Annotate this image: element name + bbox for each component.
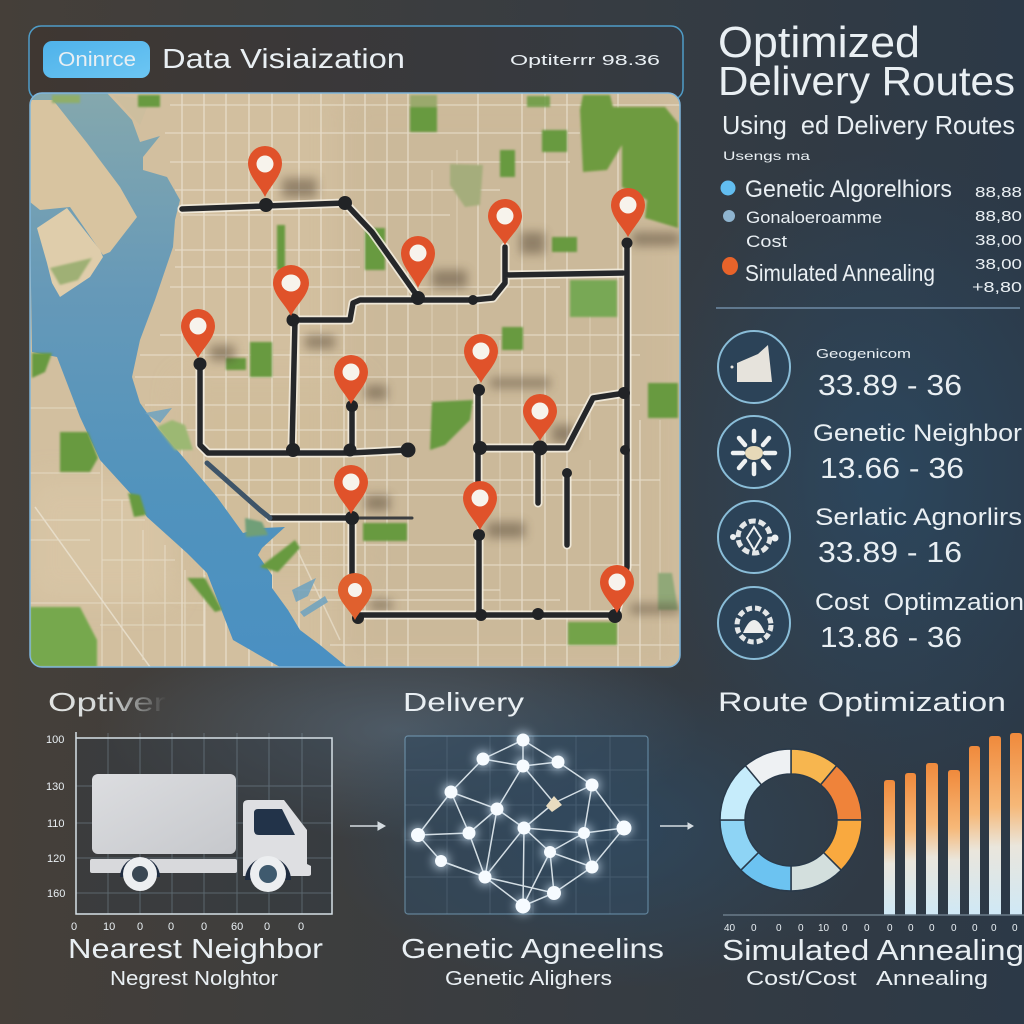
metric 3: 33.89 - 16 — [818, 537, 962, 569]
panel: route map — [28, 90, 680, 670]
chart axis labels: 0 — [864, 923, 870, 934]
x axis labels: 0 — [298, 921, 304, 933]
vegetation patches — [30, 95, 678, 667]
chart axis labels: 0 — [798, 923, 804, 934]
chart axis labels: 0 — [991, 923, 997, 934]
pin 7 — [334, 355, 368, 404]
chart axis labels: 0 — [908, 923, 914, 934]
metric 4: Cost Optimzation — [815, 589, 1024, 616]
upper island — [30, 100, 137, 255]
network node glow — [410, 732, 632, 914]
metric 3 — [718, 501, 1022, 573]
x axis labels: 0 — [137, 921, 143, 933]
section heading: delivery: Delivery — [403, 687, 524, 717]
subtitle: Using ed Delivery Routes — [722, 110, 1015, 140]
chart sublabel: nearest neighbor: Negrest Nolghtor — [110, 968, 278, 990]
pin shadows — [210, 178, 680, 614]
title: Optimized — [718, 18, 920, 67]
x axis labels: 10 — [103, 921, 115, 933]
title: Delivery Routes — [718, 58, 1015, 104]
chart axis labels: 0 — [1012, 923, 1018, 934]
chart baseline — [723, 914, 1024, 916]
chart axis labels: 0 — [751, 923, 757, 934]
map pins — [181, 146, 645, 620]
metric 1 — [718, 331, 962, 403]
lower island — [37, 208, 103, 297]
legend row: simulated annealing: +8,80 — [972, 279, 1022, 296]
pin 3 — [611, 188, 645, 237]
pin 12 — [338, 573, 372, 620]
panel: map header bar — [29, 26, 683, 100]
panel: route optimization charts — [720, 733, 1024, 934]
metric 4 — [718, 587, 1024, 659]
chart axis labels: 10 — [818, 923, 830, 934]
map border — [30, 93, 680, 667]
x axis labels — [71, 921, 304, 933]
pin 4 — [401, 236, 435, 288]
chart axis labels: 40 — [724, 923, 736, 934]
x axis labels: 0 — [71, 921, 77, 933]
y axis labels: 120 — [47, 853, 65, 865]
chart axis labels — [724, 923, 1018, 934]
chart label: simulated annealing: Simulated Annealing — [722, 935, 1024, 967]
arrow: truck to network — [350, 822, 385, 830]
section heading: optimize: Optiver — [48, 687, 166, 717]
icon: network gear — [718, 501, 790, 573]
panel: genetic network chart — [405, 732, 648, 914]
icon: delivery truck — [90, 774, 311, 892]
panel: nearest neighbor chart — [46, 732, 332, 933]
legend row: cost: Cost — [746, 232, 787, 251]
river bank details — [145, 408, 328, 617]
metric 4: 13.86 - 36 — [820, 622, 962, 654]
legend row: simulated annealing: Simulated Annealing — [745, 260, 935, 286]
chart axis labels: 0 — [951, 923, 957, 934]
badge: Oninrce — [58, 49, 136, 71]
y axis labels — [46, 734, 65, 900]
network grid — [405, 736, 648, 914]
pin 1 — [248, 146, 282, 197]
chart axis labels: 0 — [887, 923, 893, 934]
legend row: cost: 38,00 — [975, 232, 1022, 249]
header status: Optiterrr 98.36 — [510, 52, 660, 69]
divider — [716, 307, 1020, 309]
pin 8 — [464, 334, 498, 383]
icon: cost gear — [718, 587, 790, 659]
north shore detail — [113, 95, 150, 125]
river — [28, 90, 347, 667]
x axis labels: 0 — [264, 921, 270, 933]
donut chart — [720, 749, 862, 891]
header title: Data Visiaization — [162, 43, 405, 74]
panel: legend list — [720, 176, 1022, 296]
pin 9 — [523, 394, 557, 441]
metric 2: 13.66 - 36 — [820, 453, 964, 485]
pin 6 — [181, 309, 215, 358]
legend row: genetic algorithms: Genetic Algorelhiors — [745, 176, 952, 203]
legend row: cost — [746, 232, 1022, 251]
pin 11 — [463, 481, 497, 530]
panel: metric list — [718, 331, 1024, 659]
title — [718, 18, 1015, 104]
x axis labels: 60 — [231, 921, 243, 933]
pin 2 — [488, 199, 522, 245]
arrow: network to charts — [660, 823, 693, 829]
legend row: simulated annealing: 38,00 — [975, 256, 1022, 273]
network nodes — [411, 734, 632, 914]
x axis labels: 0 — [201, 921, 207, 933]
land base — [30, 90, 680, 670]
network edges — [418, 740, 624, 906]
chart axis labels: 0 — [776, 923, 782, 934]
small caption: Usengs ma — [723, 149, 810, 163]
chart axis labels: 0 — [842, 923, 848, 934]
section heading: route optimization: Route Optimization — [718, 687, 1006, 717]
legend row: generation: Gonaloeroamme — [746, 208, 882, 227]
chart sublabel: genetic: Genetic Alighers — [445, 968, 612, 990]
legend row: genetic algorithms: 88,88 — [975, 184, 1022, 201]
chart label: nearest neighbor: Nearest Neighbor — [68, 933, 323, 964]
y axis labels: 110 — [47, 818, 65, 830]
pin 10 — [334, 465, 368, 514]
chart sublabel: cost annealing: Cost/Cost Annealing — [746, 968, 988, 990]
legend row: generation: 88,80 — [975, 208, 1022, 225]
chart axis labels: 0 — [929, 923, 935, 934]
metric 1: 33.89 - 36 — [818, 370, 962, 402]
badge — [43, 41, 150, 78]
metric 2 — [718, 416, 1022, 488]
legend row: simulated annealing — [722, 256, 1022, 296]
y axis labels: 160 — [47, 888, 65, 900]
pin 13 — [600, 565, 634, 613]
metric 3: Serlatic Agnorlirs — [815, 504, 1022, 531]
delivery routes — [182, 196, 632, 624]
legend row: generation — [723, 208, 1022, 227]
chart axis labels: 0 — [972, 923, 978, 934]
icon: gear burst — [718, 416, 790, 488]
chart grid — [76, 732, 332, 914]
metric 1: Geogenicom — [816, 346, 911, 361]
y axis labels: 100 — [46, 734, 64, 746]
metric 2: Genetic Neighbor — [813, 420, 1022, 447]
icon: package — [718, 331, 790, 403]
chart label: genetic: Genetic Agneelins — [401, 933, 664, 964]
pin 5 — [273, 265, 309, 316]
street grid — [30, 93, 680, 667]
bar chart — [884, 733, 1022, 915]
x axis labels: 0 — [168, 921, 174, 933]
y axis labels: 130 — [46, 781, 64, 793]
